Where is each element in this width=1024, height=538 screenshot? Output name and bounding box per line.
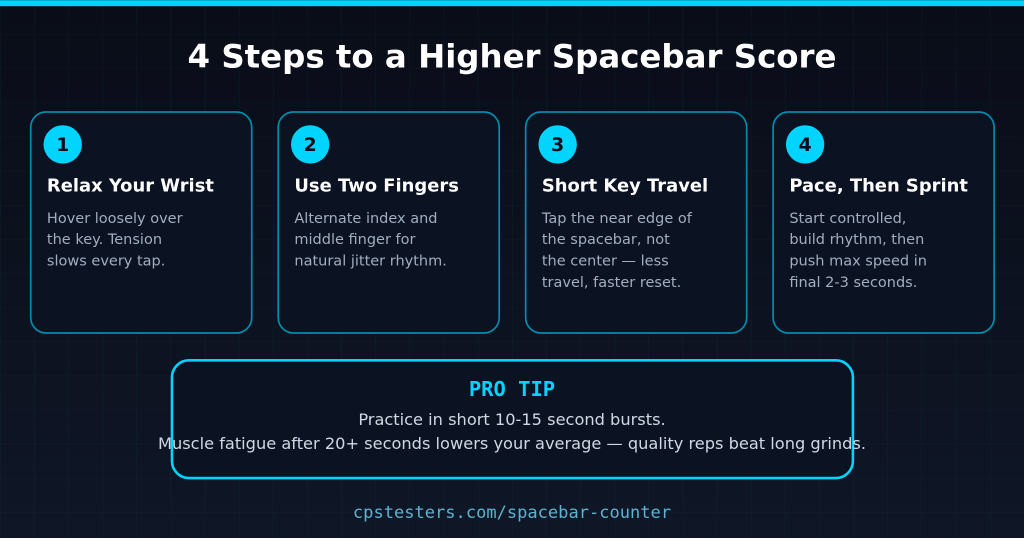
text block: step 1 description: slows every tap. (47, 254, 165, 270)
text block: step 3 description: the center — less (542, 254, 669, 270)
icon: number badge 3: 3 (551, 135, 564, 156)
top accent bar (0, 0, 1024, 6)
text block: step 1 description: the key. Tension (47, 232, 162, 248)
icon: number badge 1: 1 (56, 135, 69, 156)
text block: step 4 description: build rhythm, then (789, 232, 924, 248)
text block: step 3 description: travel, faster reset. (542, 275, 681, 291)
icon: number badge 4 (786, 125, 824, 164)
text block: step 4 description: final 2-3 seconds. (789, 275, 917, 291)
icon: number badge 2 (291, 125, 329, 164)
icon: number badge 2: 2 (304, 135, 317, 156)
icon: number badge 4: 4 (799, 135, 812, 156)
title: 4 Steps to a Higher Spacebar Score (187, 38, 837, 76)
text block: step 1 description: Hover loosely over (47, 211, 183, 227)
text block: step 4 description: Start controlled, (789, 211, 906, 227)
text block: pro tip body: Muscle fatigue after 20+ seconds lowers your average — quality reps beat long grinds. (158, 434, 866, 453)
heading: Pace, Then Sprint: Pace, Then Sprint (789, 175, 968, 196)
footer url: cpstesters.com/spacebar-counter (353, 503, 671, 523)
icon: number badge 1 (44, 125, 82, 164)
panel: pro tip (158, 360, 866, 478)
heading: Short Key Travel: Short Key Travel (542, 175, 708, 196)
text block: step 3 description: the spacebar, not (542, 232, 670, 248)
text block: step 4 description: push max speed in (789, 254, 927, 270)
heading: pro tip: PRO TIP (469, 377, 555, 401)
panel: step 3 (526, 112, 747, 333)
heading: Relax Your Wrist: Relax Your Wrist (47, 175, 214, 196)
text block: step 2 description: natural jitter rhythm. (294, 254, 447, 270)
text block: pro tip body: Practice in short 10-15 second bursts. (358, 410, 666, 429)
icon: number badge 3 (538, 125, 577, 164)
text block: step 2 description: Alternate index and (294, 211, 438, 227)
text block: step 3 description: Tap the near edge of (541, 211, 693, 227)
heading: Use Two Fingers: Use Two Fingers (294, 175, 459, 196)
panel: step 2 (278, 112, 499, 333)
text block: step 2 description: middle finger for (294, 232, 416, 248)
panel: step 4 (773, 112, 994, 333)
panel: step 1 (31, 112, 252, 333)
